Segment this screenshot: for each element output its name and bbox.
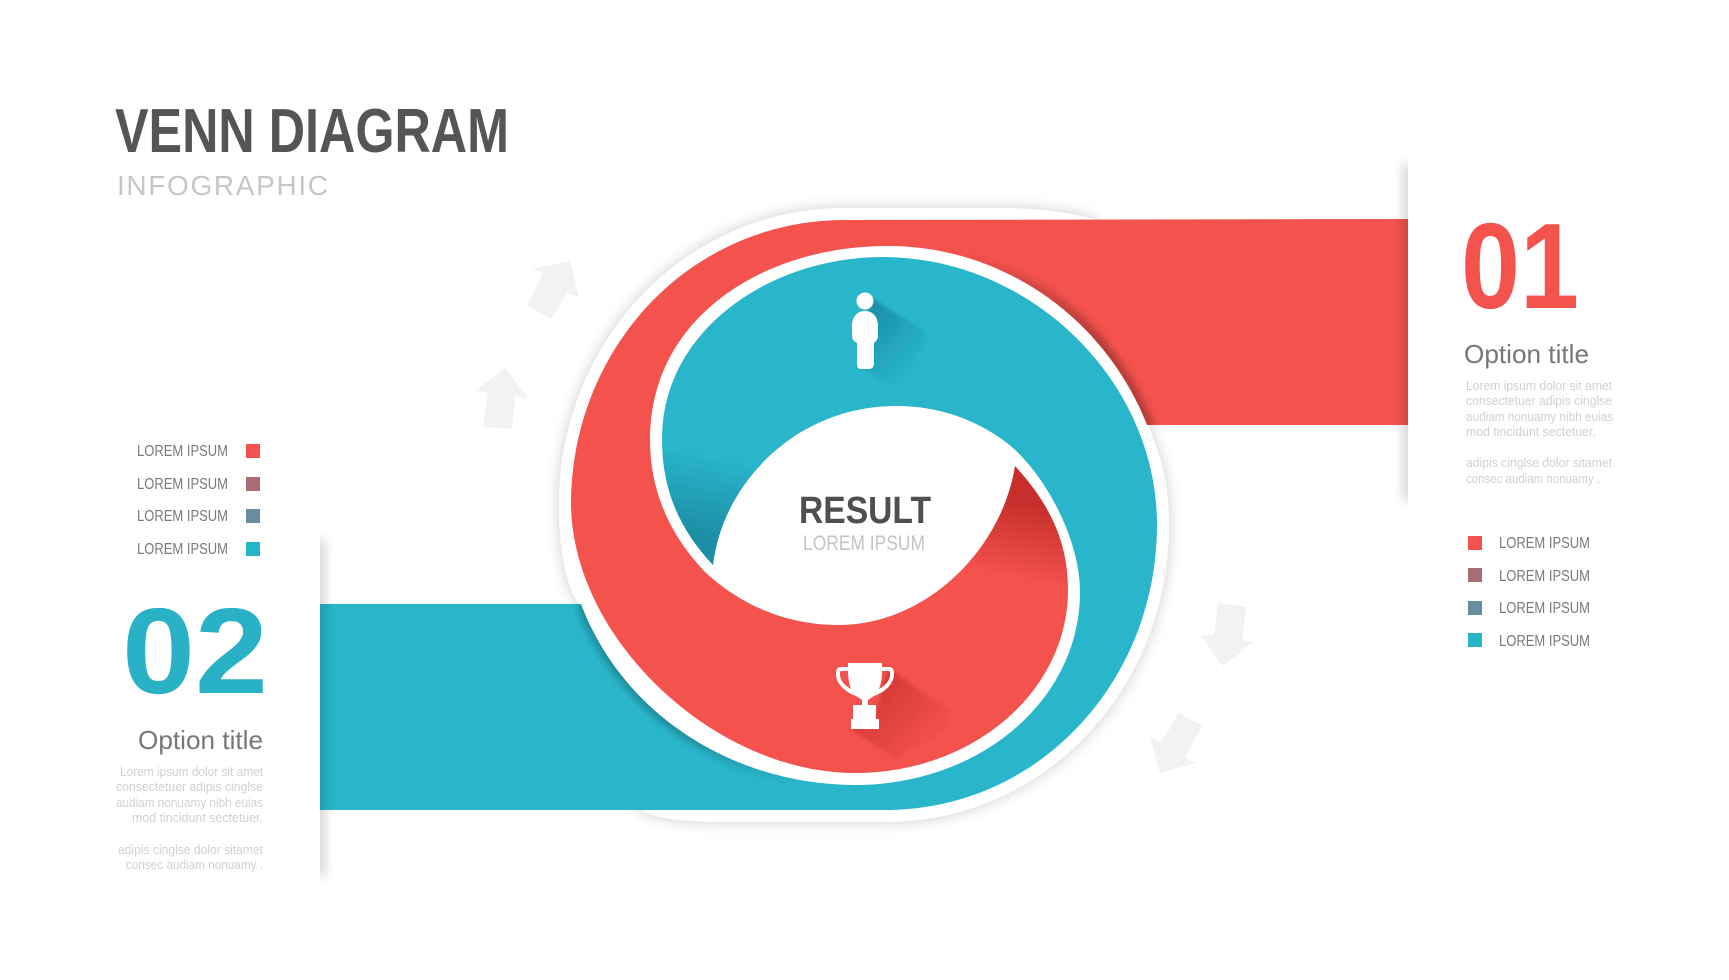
description: mod tincidunt sectetuer. <box>132 810 263 825</box>
infographic canvas <box>115 108 1612 879</box>
description: consec audiam nonuamy . <box>126 857 263 872</box>
result subtext: LOREM IPSUM <box>803 532 925 555</box>
panel: option 02 <box>116 583 268 872</box>
description <box>116 764 263 872</box>
description: adipis cinglse dolor sitamet <box>1466 455 1612 470</box>
white halo behind swirl <box>559 208 1169 822</box>
panel edge shadows <box>314 165 1414 875</box>
legend: left <box>137 443 260 558</box>
description: adipis cinglse dolor sitamet <box>118 842 263 857</box>
subtitle: INFOGRAPHIC <box>117 170 328 201</box>
legend: left: LOREM IPSUM <box>137 476 228 493</box>
title block <box>115 97 509 201</box>
arrow: middle left <box>475 368 528 429</box>
red swirl ribbon with band <box>571 219 1408 773</box>
legend: right: LOREM IPSUM <box>1499 535 1590 552</box>
legend: left: LOREM IPSUM <box>137 508 228 525</box>
description: consec audiam nonuamy . <box>1466 471 1600 486</box>
arrow: middle right <box>1201 603 1253 666</box>
legend: right <box>1468 535 1590 650</box>
icon: person <box>852 292 925 388</box>
icon: trophy <box>836 663 950 758</box>
arrow: lower right <box>1150 713 1202 773</box>
description: consectetuer adipis cinglse <box>1466 393 1612 408</box>
number 01: 01 <box>1461 198 1579 334</box>
description: mod tincidunt sectetuer. <box>1466 424 1596 439</box>
description: consectetuer adipis cinglse <box>116 779 263 794</box>
legend: left: LOREM IPSUM <box>137 541 228 558</box>
description: Lorem ipsum dolor sit amet <box>120 764 263 779</box>
center result label <box>799 490 931 555</box>
legend: right: LOREM IPSUM <box>1499 600 1590 617</box>
option title: Option title <box>138 725 263 755</box>
result heading: RESULT <box>799 490 931 532</box>
panel: option 01 <box>1461 198 1613 486</box>
title: VENN DIAGRAM <box>115 97 509 166</box>
teal swirl ribbon with band <box>320 257 1157 810</box>
legend: left: LOREM IPSUM <box>137 443 228 460</box>
description: audiam nonuamy nibh euias <box>116 795 263 810</box>
directional arrows <box>475 261 1253 773</box>
number 02: 02 <box>122 583 268 719</box>
description: Lorem ipsum dolor sit amet <box>1466 378 1612 393</box>
legend: right: LOREM IPSUM <box>1499 568 1590 585</box>
option title: Option title <box>1464 339 1589 369</box>
legend: right: LOREM IPSUM <box>1499 633 1590 650</box>
arrow: upper left <box>527 261 579 319</box>
description: audiam nonuamy nibh euias <box>1466 409 1613 424</box>
description <box>1466 378 1613 486</box>
